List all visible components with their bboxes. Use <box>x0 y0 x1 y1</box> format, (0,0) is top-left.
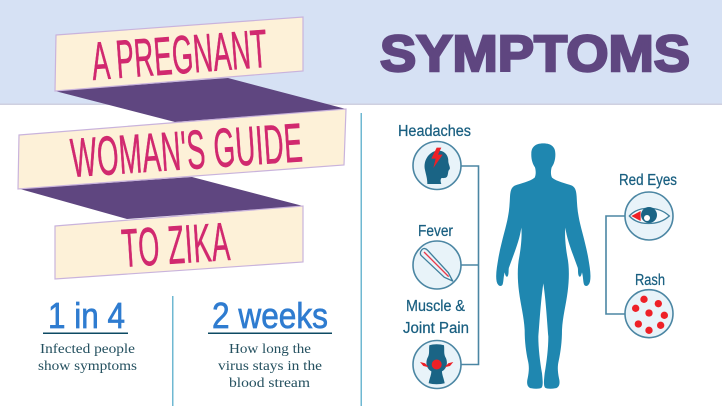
icon: red eye <box>625 192 673 240</box>
label: fever: Fever <box>418 223 453 240</box>
icon detail: joint pain point <box>432 360 442 370</box>
icon: thermometer <box>413 241 461 289</box>
banner: a pregnant: A PREGNANT <box>89 19 269 93</box>
stat: 2 weeks: blood stream <box>229 376 310 391</box>
label: headaches: Headaches <box>398 123 471 140</box>
label: muscle and joint pain: Joint Pain <box>403 320 469 337</box>
stat: 2 weeks: 2 weeks <box>212 295 328 336</box>
icon detail: red corner <box>631 211 641 221</box>
icon: rash <box>625 290 673 338</box>
body silhouette <box>496 143 590 389</box>
banner: woman's guide <box>18 109 346 190</box>
banner: to zika <box>55 206 303 280</box>
banner: to zika: TO ZIKA <box>120 212 232 280</box>
icon detail: pain mark left <box>420 362 429 367</box>
label: red eyes: Red Eyes <box>619 172 677 189</box>
header band <box>0 0 722 104</box>
stat: 1 in 4: 1 in 4 <box>48 295 125 336</box>
stat: 1 in 4: Infected people <box>40 342 135 357</box>
icon detail: lightning bolt <box>431 148 443 168</box>
icon detail: iris <box>641 207 657 223</box>
stat: 2 weeks: How long the <box>229 342 311 357</box>
stat: 1 in 4: show symptoms <box>38 359 137 374</box>
icon: joint <box>413 340 461 388</box>
title ribbon <box>18 17 346 280</box>
icon detail: pain mark right <box>445 362 453 367</box>
banner: woman's guide: WOMAN'S GUIDE <box>69 113 304 190</box>
stat: 1 in 4 <box>38 295 137 374</box>
heading: symptoms: SYMPTOMS <box>380 25 690 82</box>
stat: 2 weeks: virus stays in the <box>218 359 322 374</box>
label: muscle and joint pain <box>403 298 469 337</box>
icon detail: mercury line <box>424 252 449 277</box>
icon: headache <box>413 142 461 190</box>
connector: right symptoms <box>606 216 625 314</box>
label: muscle and joint pain: Muscle & <box>406 298 466 315</box>
stat: 2 weeks <box>208 295 332 391</box>
connector: left symptoms <box>461 166 478 364</box>
label: rash: Rash <box>635 272 665 289</box>
ribbon fold: upper <box>55 78 346 122</box>
ribbon fold: lower <box>20 177 303 219</box>
